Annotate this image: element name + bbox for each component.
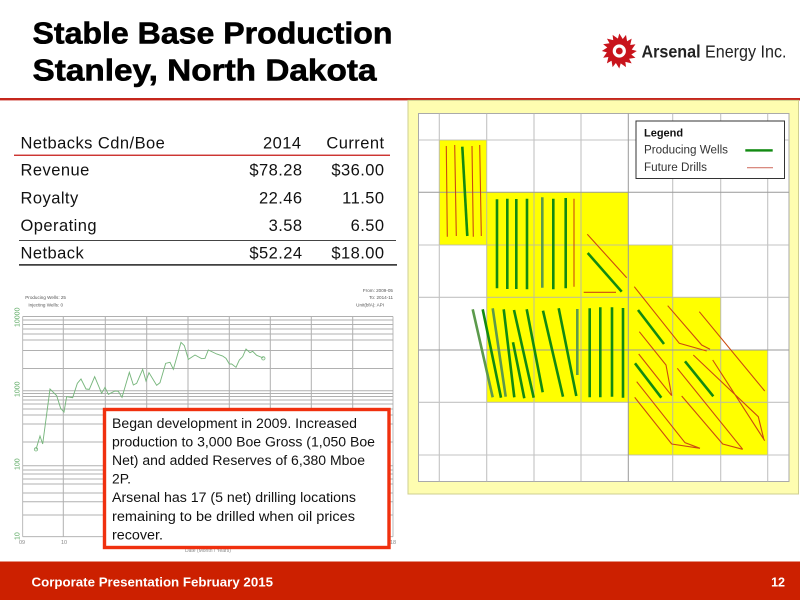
row: royalty: 22.46 xyxy=(259,189,302,207)
footer bar xyxy=(0,562,800,600)
table header row: 2014 xyxy=(263,134,302,152)
production chart: 09 xyxy=(19,540,25,546)
callout: development summary: Net) and added Reserves of 6,380 Mboe xyxy=(112,453,365,468)
chart header text: Producing Wells: 25 xyxy=(25,295,66,300)
production chart: 18 xyxy=(390,540,396,546)
chart axis labels: 100 xyxy=(14,458,22,470)
map legend: Future Drills xyxy=(644,162,707,174)
production chart xyxy=(14,288,396,554)
row: revenue: $36.00 xyxy=(331,162,384,180)
production chart: Date (Month / Years) xyxy=(185,548,231,554)
row: royalty: Royalty xyxy=(20,189,79,207)
yellow land blocks xyxy=(439,140,768,455)
chart header text: To: 2014-11 xyxy=(369,295,393,300)
map legend: Producing Wells xyxy=(644,144,728,156)
callout: development summary: 2P. xyxy=(112,472,131,486)
footer bar: 12 xyxy=(771,576,785,590)
production chart: 10 xyxy=(61,540,67,546)
logo: Arsenal Energy Inc. xyxy=(602,34,787,68)
table header row: Current xyxy=(326,134,384,152)
callout: development summary: recover. xyxy=(112,528,163,542)
row: revenue: Revenue xyxy=(20,162,90,180)
callout: development summary: production to 3,000 Boe Gross (1,050 Boe xyxy=(112,434,375,450)
callout: development summary: Began development in 2009. Increased xyxy=(112,416,357,431)
callout: development summary: remaining to be drilled when oil prices xyxy=(112,509,355,524)
title xyxy=(32,16,392,88)
row: royalty xyxy=(20,189,384,207)
row: netback: $18.00 xyxy=(331,244,384,262)
chart axis labels: 10000 xyxy=(14,307,22,327)
row: operating: 6.50 xyxy=(351,217,384,235)
producing wells xyxy=(462,147,713,398)
row: royalty: 11.50 xyxy=(342,189,384,207)
row: revenue: $78.28 xyxy=(249,162,302,180)
chart header text: Injecting Wells: 0 xyxy=(28,302,63,308)
chart axis labels: 1000 xyxy=(14,381,22,397)
row: operating xyxy=(20,217,384,235)
row: netback xyxy=(20,244,384,262)
map legend xyxy=(636,121,784,178)
chart axis labels: 10 xyxy=(14,532,22,540)
production curve xyxy=(34,342,265,451)
map panel xyxy=(408,100,798,494)
table header row: Netbacks Cdn/Boe xyxy=(20,134,165,152)
row: netback: $52.24 xyxy=(249,244,302,262)
header rule xyxy=(0,98,800,100)
map grid xyxy=(418,114,789,482)
logo: Arsenal Energy Inc.: Arsenal Energy Inc. xyxy=(642,42,787,62)
callout: development summary xyxy=(104,410,389,548)
chart header text xyxy=(25,288,393,308)
table header row xyxy=(20,134,384,152)
row: revenue xyxy=(20,162,384,180)
chart header text: From: 2009-05 xyxy=(363,288,393,293)
map legend: Legend xyxy=(644,128,683,140)
row: operating: 3.58 xyxy=(269,217,302,235)
footer bar: Corporate Presentation February 2015 xyxy=(32,576,273,590)
chart header text: Unit(bfA): API xyxy=(356,302,384,308)
row: netback: Netback xyxy=(20,244,84,262)
callout: development summary: Arsenal has 17 (5 net) drilling locations xyxy=(112,490,356,505)
future drills xyxy=(446,145,765,449)
chart axis labels xyxy=(14,307,22,540)
netbacks table xyxy=(14,134,397,266)
row: operating: Operating xyxy=(20,217,97,235)
title: Stanley, North Dakota xyxy=(32,52,377,88)
title: Stable Base Production xyxy=(32,16,392,50)
